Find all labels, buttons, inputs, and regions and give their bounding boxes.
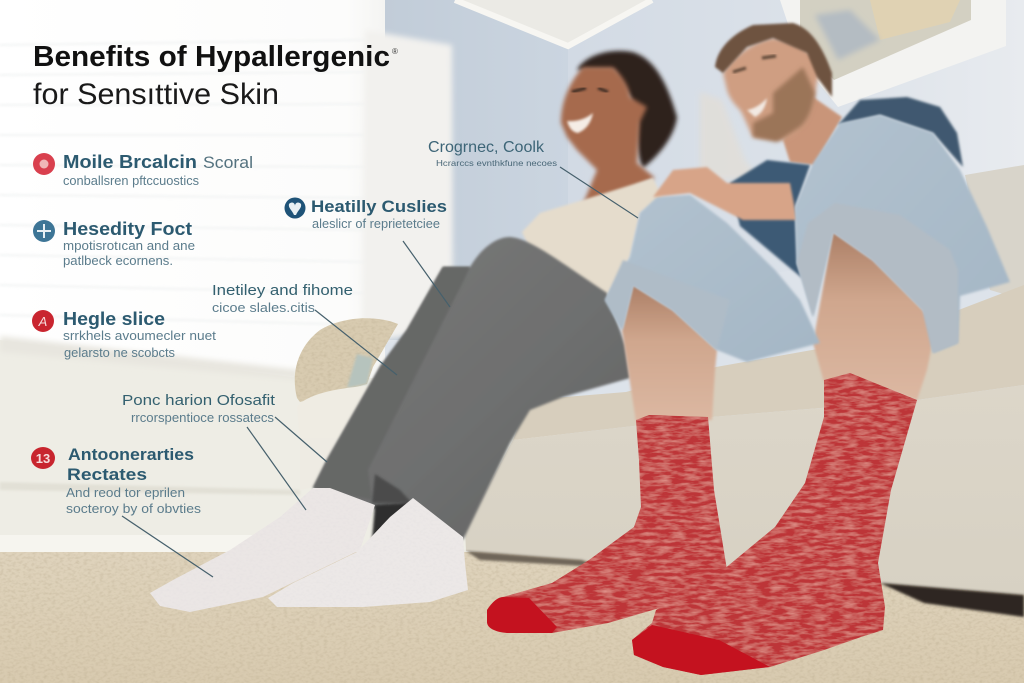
benefit: Antoonerarties Rectates: Rectates xyxy=(67,465,147,484)
man: left red sock xyxy=(487,415,727,633)
benefit: Antoonerarties Rectates: Antoonerarties xyxy=(68,445,194,464)
title: for Sensıttive Skin xyxy=(33,78,279,111)
callout: Ponc harion Ofosafit: rrcorspentioce rossatecs xyxy=(131,411,274,425)
man: right sock toe xyxy=(632,625,770,675)
woman xyxy=(150,51,677,612)
callout: Heatilly Cuslies: Heatilly Cuslies xyxy=(311,197,447,216)
man: shirt body xyxy=(730,160,810,278)
callout: Heatilly Cuslies: aleslicr of reprietetciee xyxy=(312,217,440,231)
icon: red letter badge xyxy=(32,310,54,332)
title: Benefits of Hypallergenic xyxy=(33,41,390,73)
throw cushion xyxy=(295,318,398,402)
leader line xyxy=(275,417,327,462)
sofa xyxy=(297,165,1024,617)
callout: Crogrnec, Coolk xyxy=(428,139,638,218)
woman: face and neck xyxy=(561,67,655,204)
benefit: Moile Brcalcin Scoral: Scoral xyxy=(203,153,253,172)
man: right jean leg xyxy=(795,115,1010,353)
callout: Ponc harion Ofosafit xyxy=(122,392,327,510)
leader line xyxy=(247,427,306,510)
woman: white sock right xyxy=(268,498,468,607)
title: ® xyxy=(392,47,398,56)
curtain xyxy=(362,30,453,345)
man: face xyxy=(723,38,822,140)
benefit: Hesedity Foct: mpotisrotıcan and ane xyxy=(63,239,195,253)
icon: red number badge: 13 xyxy=(36,451,50,466)
window blinds xyxy=(0,40,365,325)
man: shirt shoulder xyxy=(838,97,963,167)
woman: hem shadow xyxy=(372,474,412,503)
benefit: Hegle slice: Hegle slice xyxy=(63,309,165,329)
title xyxy=(33,41,398,111)
leader line xyxy=(122,516,213,577)
dried pampas decor xyxy=(700,92,760,180)
benefit: Hegle slice: srrkhels avoumecler nuet xyxy=(63,329,217,343)
man: right red sock xyxy=(632,373,917,675)
man: beard xyxy=(753,67,815,142)
benefit: Antoonerarties Rectates: And reod tor eprilen xyxy=(66,486,185,500)
woman: smile xyxy=(567,113,593,133)
man: eyes xyxy=(733,56,776,72)
icon: blue plus xyxy=(33,220,55,242)
callout: Inetiley and fihome xyxy=(212,282,397,375)
benefit: Hesedity Foct: patlbeck ecornens. xyxy=(63,254,173,268)
callout: Crogrnec, Coolk: Hcrarccs evnthkfune necoes xyxy=(436,158,557,168)
man: hair xyxy=(715,23,832,97)
callout: Inetiley and fihome: cicoe slales.citis xyxy=(212,301,315,315)
icon: navy heart badge xyxy=(284,198,306,218)
woman: eyes xyxy=(572,88,608,92)
benefit: Antoonerarties Rectates xyxy=(31,445,213,577)
leader line xyxy=(315,310,397,375)
icon: red number badge xyxy=(31,447,55,469)
picture frame xyxy=(780,0,1006,107)
benefit: Moile Brcalcin Scoral: conballsren pftccuostics xyxy=(63,174,199,188)
man: right jean cuff xyxy=(797,203,958,353)
woman: hair xyxy=(577,51,677,168)
leader line xyxy=(560,167,638,218)
woman: grey trousers xyxy=(313,237,630,540)
man: neck xyxy=(783,97,842,165)
benefit: Moile Brcalcin Scoral: Moile Brcalcin xyxy=(63,152,197,172)
callout: Heatilly Cuslies xyxy=(284,197,450,307)
benefit: Hesedity Foct: Hesedity Foct xyxy=(63,219,192,239)
woman: far leg tone xyxy=(313,267,470,500)
benefit: Hegle slice: gelarsto ne scobcts xyxy=(64,346,175,360)
leader line xyxy=(403,241,450,307)
carpet xyxy=(0,552,1024,683)
benefit: Moile Brcalcin Scoral xyxy=(33,152,253,188)
callout: Inetiley and fihome: Inetiley and fihome xyxy=(212,282,353,299)
woman: gap between socks xyxy=(372,503,410,540)
benefit: Hesedity Foct xyxy=(33,219,195,268)
man: right leg skin xyxy=(813,232,935,400)
icon: red flower xyxy=(33,153,55,175)
callout: Crogrnec, Coolk: Crogrnec, Coolk xyxy=(428,139,545,156)
man: left jean leg xyxy=(605,195,820,362)
man: left jean cuff xyxy=(605,260,730,350)
icon: red letter badge: A xyxy=(38,314,47,329)
woman: white sock left xyxy=(150,488,375,612)
woman: sweater xyxy=(522,178,662,300)
man xyxy=(487,23,1010,675)
benefit: Hegle slice xyxy=(32,309,217,360)
lower wall with moldings xyxy=(0,336,560,560)
callout: Ponc harion Ofosafit: Ponc harion Ofosafit xyxy=(122,392,276,409)
man: arm and hand xyxy=(653,167,797,220)
man: smile xyxy=(747,98,767,117)
man: left leg skin xyxy=(622,285,717,422)
benefit: Antoonerarties Rectates: socteroy by of obvties xyxy=(66,502,201,516)
man: left sock toe xyxy=(487,597,557,633)
